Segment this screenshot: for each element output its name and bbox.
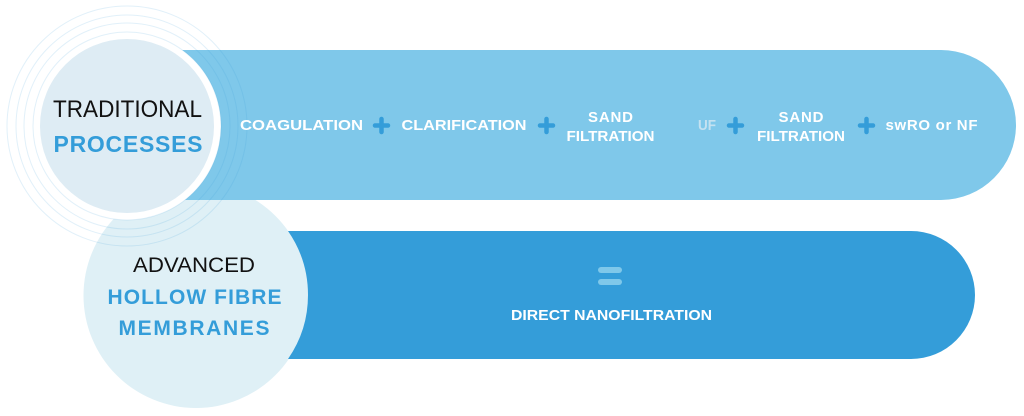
icon: equals sign bbox=[598, 267, 622, 285]
icon: plus 4 bbox=[860, 119, 873, 132]
step: coagulation: COAGULATION bbox=[240, 117, 363, 134]
step: sand filtration: SAND bbox=[588, 109, 633, 126]
label: direct nanofiltration: DIRECT NANOFILTRATION bbox=[511, 307, 712, 324]
heading: advanced hollow fibre membranes: ADVANCED bbox=[133, 253, 255, 277]
panel: direct nanofiltration bar bbox=[288, 231, 975, 359]
heading: traditional processes bbox=[53, 96, 202, 157]
step: swRO or NF: swRO or NF bbox=[886, 117, 978, 134]
step: sand filtration: FILTRATION bbox=[566, 128, 654, 145]
icon: plus 1 bbox=[375, 119, 388, 132]
heading: advanced hollow fibre membranes bbox=[108, 253, 282, 340]
concentric rings bbox=[7, 6, 247, 246]
icon: plus 2 bbox=[540, 119, 553, 132]
white ring around traditional circle bbox=[33, 32, 221, 220]
heading: traditional processes: PROCESSES bbox=[54, 131, 202, 157]
step: sand filtration second: SAND bbox=[778, 109, 824, 126]
icon: plus 3 bbox=[729, 119, 742, 132]
process steps bbox=[240, 109, 978, 145]
step: UF: UF bbox=[698, 117, 716, 134]
plus icons bbox=[375, 119, 873, 132]
step: sand filtration second bbox=[757, 109, 845, 145]
circle: traditional background bbox=[40, 39, 214, 213]
step: sand filtration second: FILTRATION bbox=[757, 128, 845, 145]
heading: traditional processes: TRADITIONAL bbox=[53, 96, 202, 123]
circle: advanced background bbox=[84, 183, 308, 408]
heading: advanced hollow fibre membranes: HOLLOW FIBRE bbox=[108, 286, 282, 309]
step: sand filtration bbox=[566, 109, 654, 145]
heading: advanced hollow fibre membranes: MEMBRANES bbox=[118, 317, 270, 340]
panel: traditional processes bar bbox=[127, 50, 1016, 200]
step: clarification: CLARIFICATION bbox=[402, 117, 526, 134]
